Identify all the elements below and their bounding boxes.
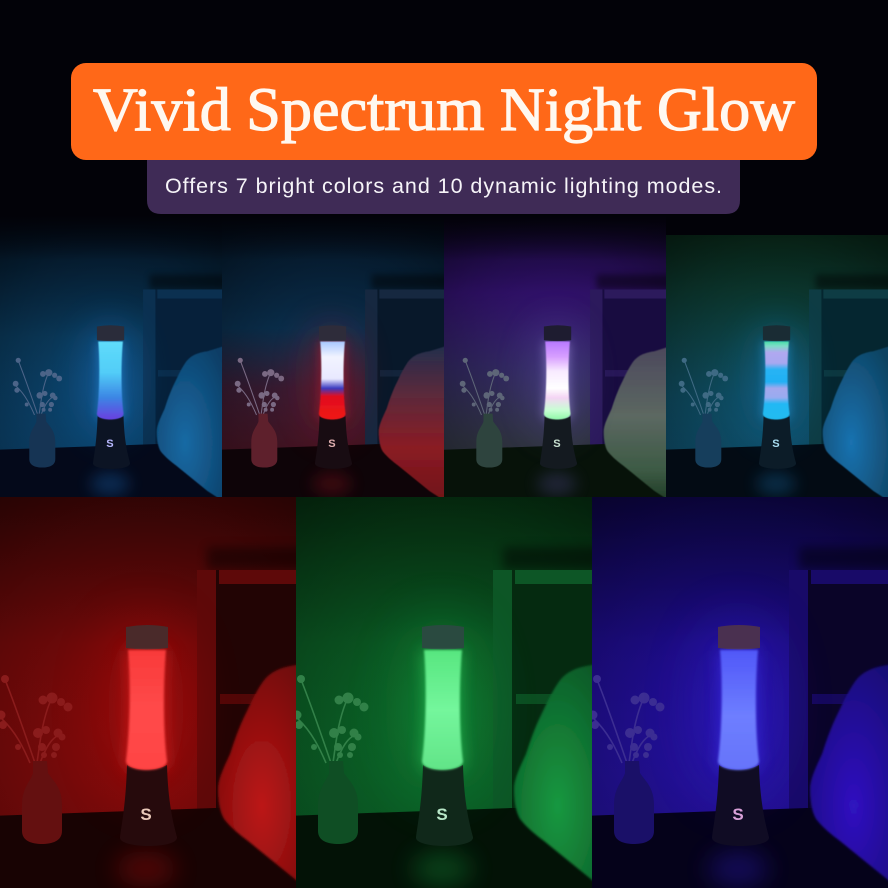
blanket	[810, 657, 888, 888]
lamp: blue	[85, 323, 135, 469]
logo: S	[553, 438, 561, 450]
subtitle banner	[147, 150, 740, 214]
logo: S	[328, 438, 336, 450]
panel: red lamp photo	[0, 497, 296, 888]
lamp: green and cyan bands	[751, 323, 801, 469]
vase with flowers	[0, 675, 72, 844]
top fade over upper photo row	[0, 215, 666, 260]
panel: blue lamp photo	[0, 229, 222, 497]
title banner	[71, 63, 817, 160]
lamp: indigo	[700, 622, 776, 846]
vase with flowers	[13, 358, 62, 468]
lamp: red	[108, 622, 184, 846]
blanket	[216, 664, 296, 882]
vase with flowers	[235, 358, 284, 468]
blanket	[603, 347, 666, 497]
vase with flowers	[679, 358, 728, 468]
lamp: blue and red	[307, 323, 357, 469]
logo: S	[772, 438, 780, 450]
logo: S	[436, 805, 448, 824]
panel: purple and white lamp photo	[444, 224, 666, 497]
vase with flowers	[588, 675, 664, 844]
lamp: purple and white	[532, 323, 582, 469]
logo: S	[732, 805, 744, 824]
blanket	[513, 664, 592, 882]
panel: blue and red lamp photo	[222, 228, 444, 497]
panel: green and cyan lamp photo	[666, 235, 888, 497]
vase with flowers	[292, 675, 368, 844]
vase with flowers	[460, 358, 509, 468]
blanket	[157, 346, 224, 502]
blanket	[823, 346, 888, 502]
subtitle text: Offers 7 bright colors and 10 dynamic lighting modes.	[165, 174, 722, 198]
logo: S	[140, 805, 152, 824]
blanket	[379, 346, 446, 502]
title text: Vivid Spectrum Night Glow	[93, 77, 795, 144]
panel: green lamp photo	[296, 497, 592, 888]
panel: indigo lamp photo	[592, 497, 888, 888]
lamp: green	[404, 622, 480, 846]
logo: S	[106, 438, 114, 450]
